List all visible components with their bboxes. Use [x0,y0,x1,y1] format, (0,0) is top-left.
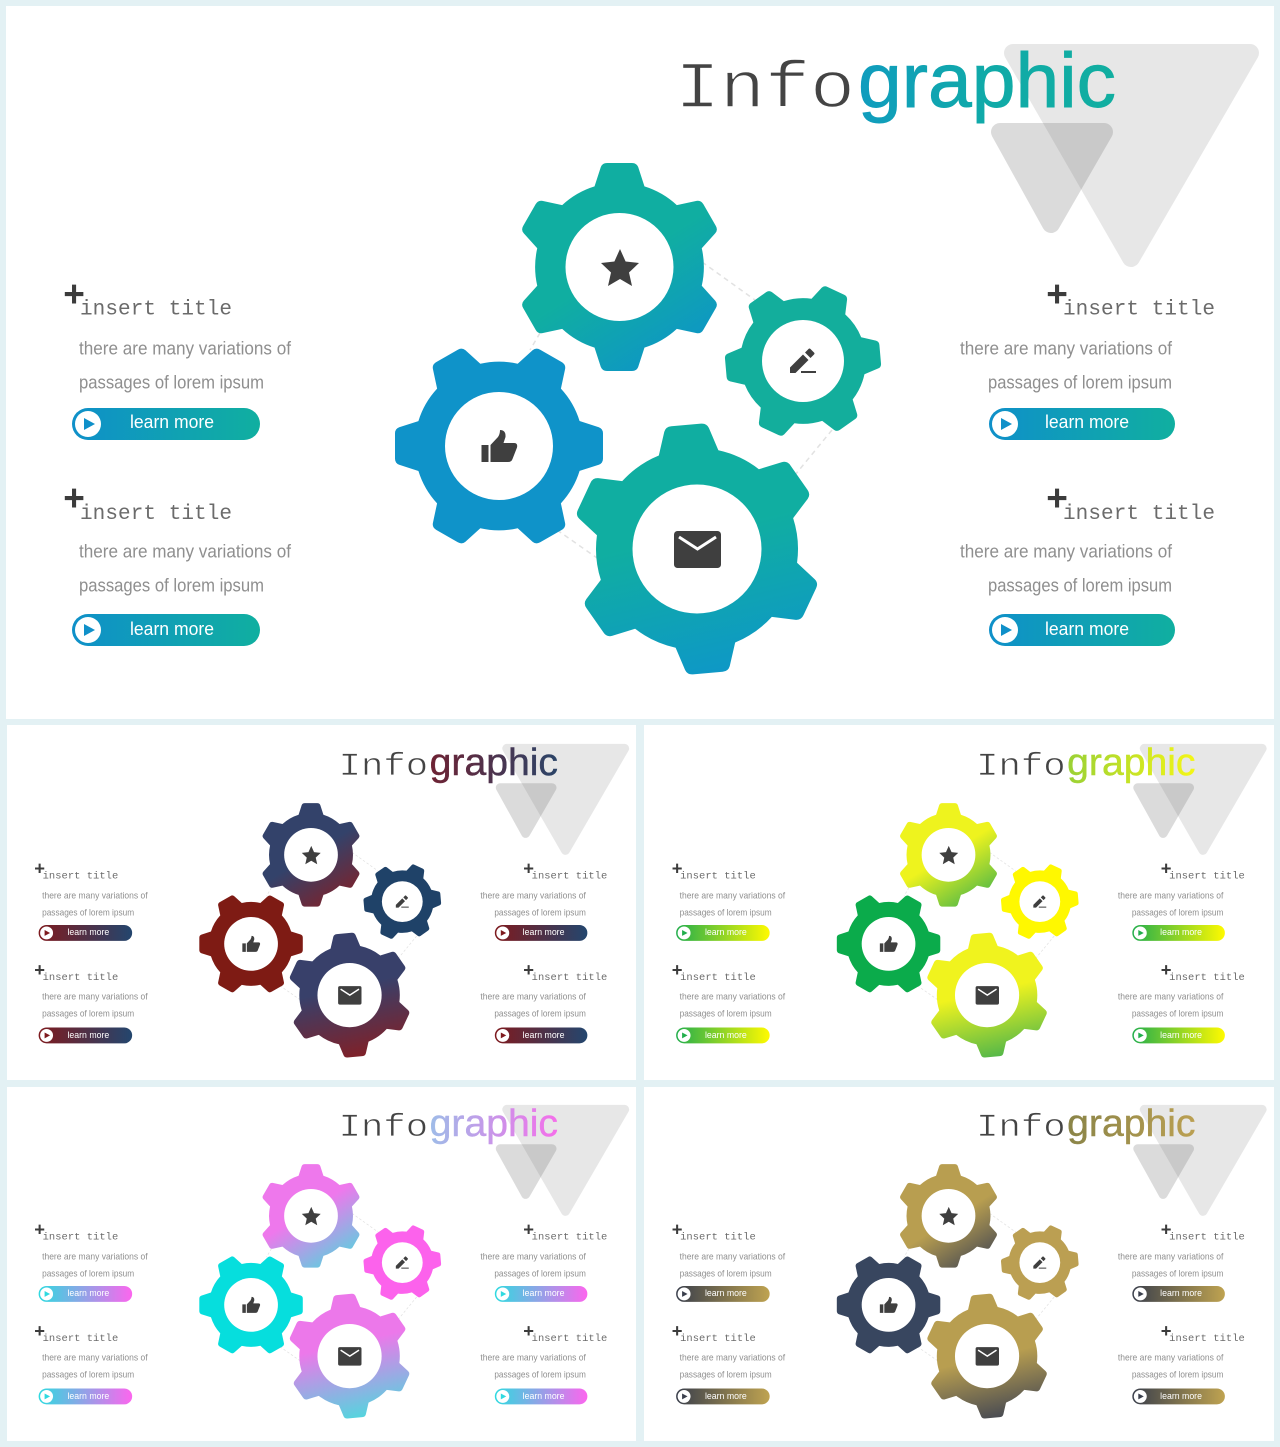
block: bottom right: learn more [523,1391,564,1401]
block: bottom left: passages of lorem ipsum [680,1008,772,1018]
block: top left: learn more [705,927,747,937]
gear: mail [286,1289,413,1423]
gear: thumbs up [183,1236,319,1374]
block: bottom right [480,1320,607,1404]
block: bottom left: learn more [67,1391,109,1401]
gear: mail [924,1289,1050,1423]
block: bottom right: learn more [1045,619,1129,639]
block: bottom left: passages of lorem ipsum [42,1369,134,1379]
block: bottom right [1118,1320,1245,1404]
block: bottom right: + [1161,1320,1172,1341]
gear: star [263,803,359,907]
block: bottom right: insert title [1063,503,1215,526]
block: top left: learn more [130,412,214,432]
block: bottom left: passages of lorem ipsum [79,576,264,596]
block: bottom left: passages of lorem ipsum [680,1369,772,1379]
block: bottom right: insert title [1169,1333,1245,1345]
block: top left: insert title [43,870,118,882]
block: top left: there are many variations of [680,1251,786,1261]
gear: pencil [704,260,902,462]
block: bottom right: there are many variations of [480,1352,586,1362]
panel: maroon and navy version [7,725,636,1080]
block: top right [1118,857,1245,941]
block: bottom right: insert title [532,972,607,984]
block: top left: there are many variations of [42,890,148,900]
gear: star [263,1164,359,1268]
block: bottom right: learn more [523,1030,564,1040]
block: top right: + [523,857,534,878]
block: bottom left: + [34,959,45,980]
gear: thumbs up [821,1236,956,1374]
title: graphic [430,741,558,784]
block: top left: learn more [67,927,109,937]
block: bottom left: insert title [43,1333,118,1345]
block: top right [480,857,607,941]
block: bottom right: + [1046,478,1068,518]
block: top right: learn more [1160,1288,1202,1298]
block: top right [1118,1218,1245,1302]
block: bottom left: passages of lorem ipsum [42,1008,134,1018]
block: bottom right: insert title [1169,972,1245,984]
block: bottom right: passages of lorem ipsum [494,1008,586,1018]
block: top left: + [34,1218,45,1239]
block: bottom left: insert title [680,1333,756,1345]
block: top left: + [63,274,85,314]
block: top left: insert title [43,1231,118,1243]
block: top left: insert title [680,870,756,882]
block: top right: + [1161,857,1172,878]
block: top left: passages of lorem ipsum [680,1268,772,1278]
block: top left: passages of lorem ipsum [42,907,134,917]
block: bottom right [1118,959,1245,1043]
block: bottom right: + [523,1320,534,1341]
title [976,741,1196,786]
dashed connectors [904,852,1054,1001]
decorative triangles [500,1109,625,1211]
block: bottom right: insert title [532,1333,607,1345]
block: bottom right: there are many variations of [1118,991,1224,1001]
block: top right: there are many variations of [960,338,1173,358]
block: bottom left [672,1320,786,1404]
block: bottom left: + [63,478,85,518]
title: graphic [430,1102,558,1145]
block: top left [672,1218,786,1302]
panel: yellow and green version [644,725,1274,1080]
block: bottom left: there are many variations of [42,1352,148,1362]
panel: gold and slate version [644,1087,1274,1441]
decorative triangles [1000,53,1250,258]
block: top left: + [672,1218,682,1239]
dashed connectors [266,1213,417,1362]
block: bottom left: + [672,1320,682,1341]
block: bottom left: insert title [43,972,118,984]
gear: thumbs up [821,875,956,1013]
block: top left: learn more [705,1288,747,1298]
block: top right: insert title [532,1231,607,1243]
block: top right: + [1161,1218,1172,1239]
block: bottom right [960,478,1215,646]
block: top left: insert title [680,1231,756,1243]
title [339,1102,558,1147]
gear: star [900,803,997,907]
dashed connectors [904,1213,1054,1362]
block: bottom right: passages of lorem ipsum [1132,1008,1223,1018]
title [675,38,1116,128]
title: Info [976,748,1066,786]
block: top left: passages of lorem ipsum [42,1268,134,1278]
gear: pencil [353,1212,451,1313]
block: bottom left [63,478,292,646]
title: Info [339,1109,428,1147]
block: bottom right: passages of lorem ipsum [1132,1369,1223,1379]
block: top right: + [1046,274,1068,314]
decorative triangles [1138,748,1262,850]
block: top right: there are many variations of [1118,890,1224,900]
panel: pink and cyan version [7,1087,636,1441]
block: top left: there are many variations of [42,1251,148,1261]
block: top right [480,1218,607,1302]
block: top right: insert title [1169,1231,1245,1243]
title: graphic [1067,741,1196,784]
block: bottom right: passages of lorem ipsum [494,1369,586,1379]
block: bottom left [34,1320,148,1404]
block: bottom right: there are many variations of [1118,1352,1224,1362]
block: top left: + [672,857,682,878]
block: top left: + [34,857,45,878]
block: top right: passages of lorem ipsum [1132,1268,1223,1278]
block: bottom right: learn more [1160,1391,1202,1401]
block: bottom left: there are many variations of [79,542,292,562]
gear: pencil [991,1212,1089,1313]
block: top right: there are many variations of [1118,1251,1224,1261]
block: top left: there are many variations of [79,338,292,358]
block: top right: passages of lorem ipsum [988,372,1172,392]
block: bottom right: passages of lorem ipsum [988,576,1172,596]
block: bottom left: learn more [705,1391,747,1401]
block: bottom left: learn more [67,1030,109,1040]
block: bottom right: there are many variations of [480,991,586,1001]
block: top left: passages of lorem ipsum [680,907,772,917]
block: bottom left: there are many variations of [680,1352,786,1362]
block: bottom left: learn more [705,1030,747,1040]
block: bottom left [672,959,786,1043]
title: Info [976,1109,1066,1147]
block: top right [960,274,1215,440]
block: top right: learn more [523,927,564,937]
gear: star [900,1164,997,1268]
decorative triangles [500,748,625,850]
block: top left: learn more [67,1288,109,1298]
block: bottom right: + [1161,959,1172,980]
decorative triangles [1138,1109,1262,1211]
gear: pencil [353,851,451,952]
block: top left [63,274,292,440]
block: top right: there are many variations of [480,890,586,900]
gear: pencil [991,851,1089,952]
block: top right: learn more [1160,927,1202,937]
block: bottom right [480,959,607,1043]
block: bottom left [34,959,148,1043]
gear: thumbs up [183,875,319,1013]
title: Info [339,748,428,786]
block: bottom left: + [34,1320,45,1341]
block: top left [672,857,786,941]
block: top right: learn more [523,1288,564,1298]
block: top left: insert title [80,298,232,322]
block: bottom left: learn more [130,619,214,639]
title [339,741,558,786]
dashed connectors [530,262,832,560]
block: bottom left: there are many variations of [42,991,148,1001]
block: top right: passages of lorem ipsum [494,1268,586,1278]
gear: mail [286,928,413,1062]
block: top right: insert title [532,870,607,882]
dashed connectors [266,852,417,1001]
block: bottom right: there are many variations of [960,542,1173,562]
gear: mail [570,415,824,683]
gear: mail [924,928,1050,1062]
block: bottom left: insert title [80,503,232,526]
gear: thumbs up [363,307,635,585]
block: top right: insert title [1169,870,1245,882]
block: bottom left: insert title [680,972,756,984]
block: top right: insert title [1063,298,1215,322]
block: top right: passages of lorem ipsum [494,907,586,917]
panel: main teal and blue version [6,6,1274,719]
gear: star [522,163,717,371]
block: top right: learn more [1045,412,1129,432]
block: bottom right: + [523,959,534,980]
block: top left [34,1218,148,1302]
block: top left: passages of lorem ipsum [79,372,264,392]
block: top right: + [523,1218,534,1239]
block: bottom left: + [672,959,682,980]
title: Info [675,53,855,128]
block: bottom left: there are many variations of [680,991,786,1001]
block: top right: passages of lorem ipsum [1132,907,1223,917]
title: graphic [1067,1102,1196,1145]
block: top right: there are many variations of [480,1251,586,1261]
title [976,1102,1196,1147]
block: top left: there are many variations of [680,890,786,900]
block: bottom right: learn more [1160,1030,1202,1040]
block: top left [34,857,148,941]
title: graphic [858,38,1116,124]
